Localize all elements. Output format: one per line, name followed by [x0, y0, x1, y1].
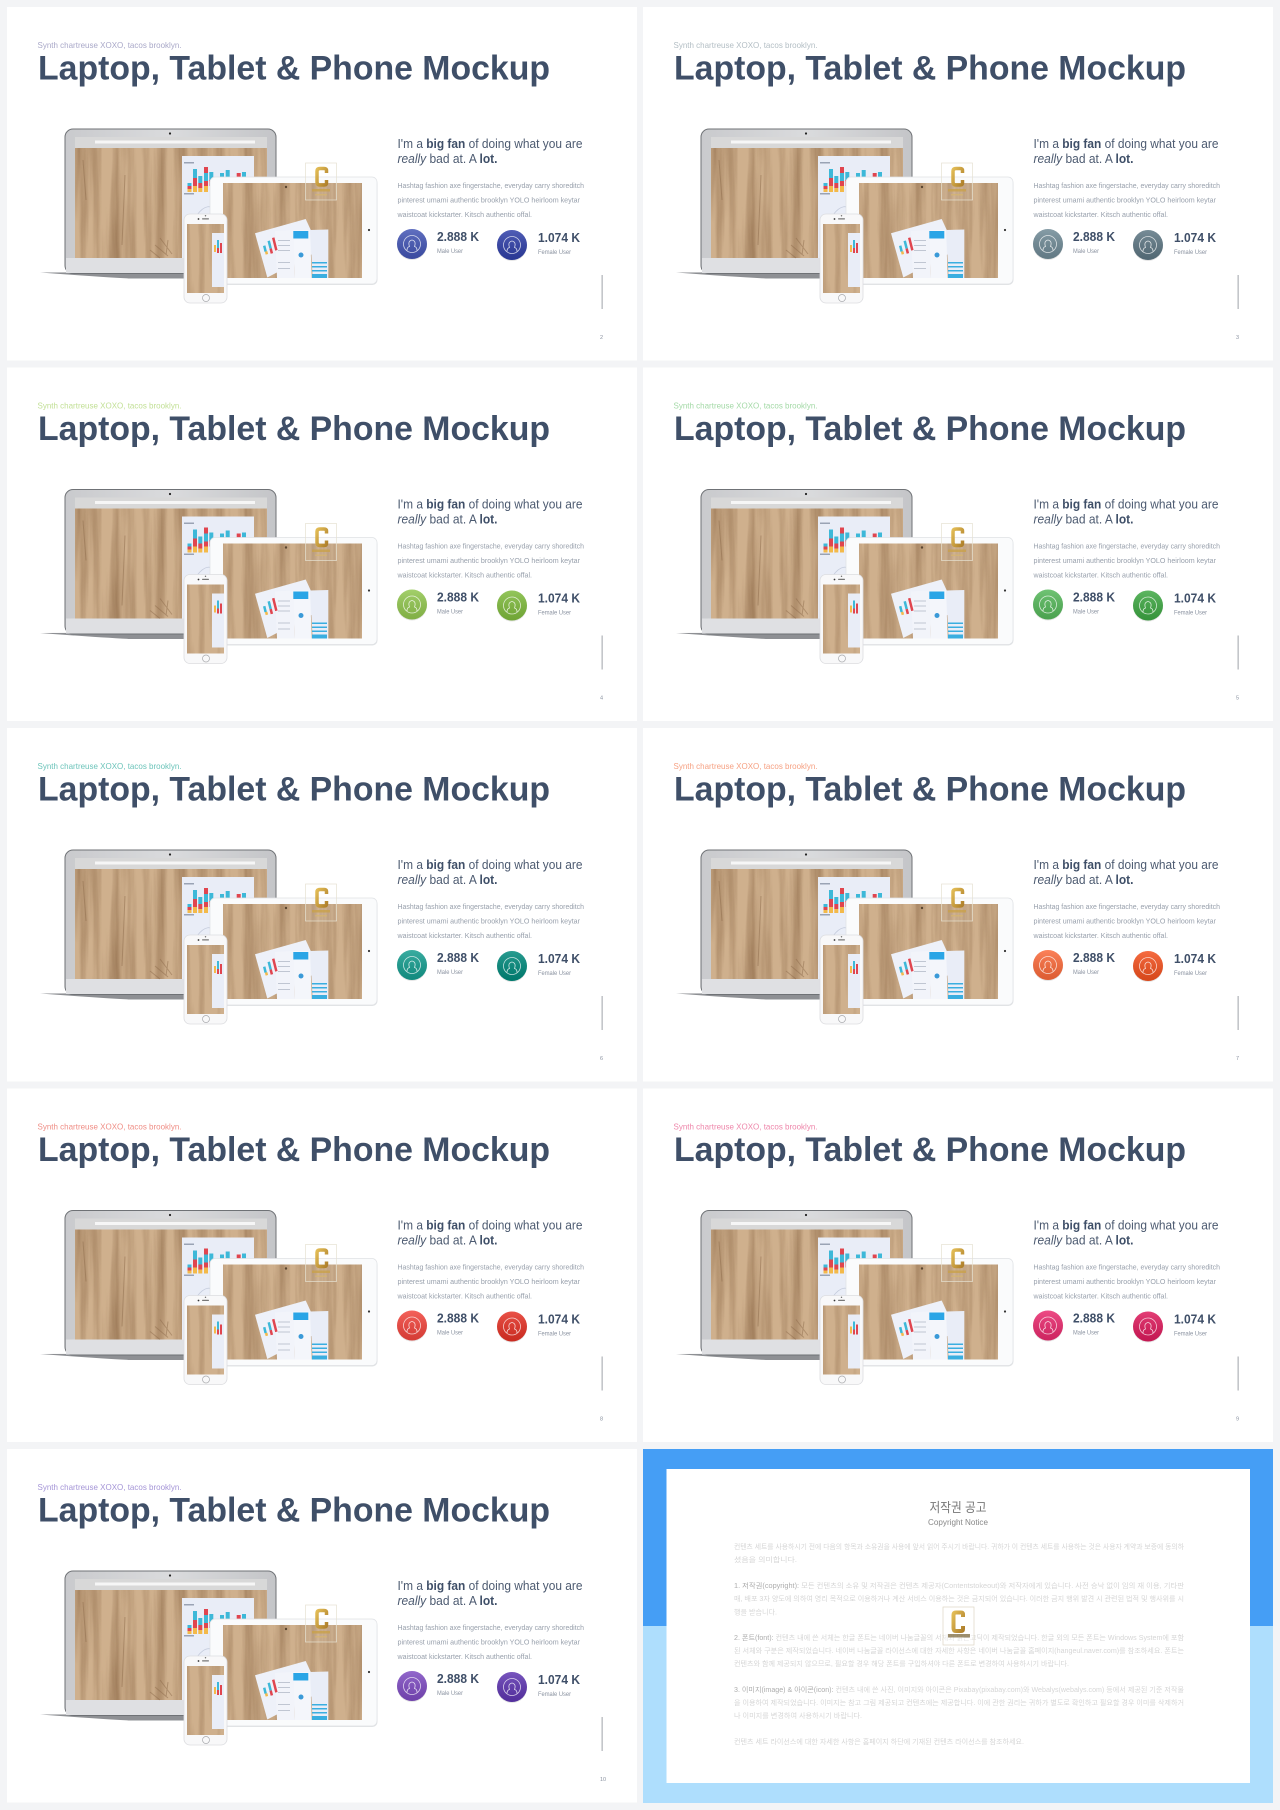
stat: male users [437, 229, 480, 255]
stat: male users [1073, 950, 1116, 976]
page number: 8 [600, 1416, 603, 1422]
stat: male users [437, 590, 480, 616]
stat: male users: 2.888 K [437, 1671, 480, 1686]
device mockup: laptop, tablet and phone [676, 490, 1014, 664]
title: Laptop, Tablet & Phone Mockup [674, 1131, 1186, 1169]
body text: pinterest umami authentic brooklyn YOLO heirloom keytar [398, 1640, 581, 1646]
panel: copyright notice [643, 1449, 1273, 1803]
stat: male users: Male User [437, 1330, 463, 1336]
device mockup: laptop, tablet and phone [40, 850, 378, 1024]
subtitle: Synth chartreuse XOXO, tacos brooklyn. [38, 400, 182, 410]
subtitle: Synth chartreuse XOXO, tacos brooklyn. [674, 761, 818, 771]
copyright intro text: 셨음을 의미합니다. [734, 1555, 797, 1564]
body text [396, 1264, 584, 1300]
body text: pinterest umami authentic brooklyn YOLO heirloom keytar [1034, 198, 1217, 204]
section 2: font [734, 1633, 1185, 1668]
headline text [398, 858, 583, 887]
device mockup: laptop, tablet and phone [40, 1210, 378, 1384]
page number: 5 [1236, 696, 1239, 702]
body text: waistcoat kickstarter. Kitsch authentic offal. [396, 572, 532, 580]
icon: female user [1133, 951, 1163, 982]
body text: Hashtag fashion axe fingerstache, everyday carry shoreditch [398, 1625, 584, 1632]
panel: slide 2 indigo [7, 7, 637, 360]
body text: waistcoat kickstarter. Kitsch authentic offal. [1032, 212, 1168, 219]
icon: male user [1033, 229, 1063, 260]
headline text: I'm a big fan of doing what you are [398, 1218, 583, 1232]
body text: waistcoat kickstarter. Kitsch authentic offal. [1032, 1294, 1168, 1300]
headline text: really bad at. A lot. [1034, 152, 1134, 166]
device mockup: laptop, tablet and phone [40, 490, 378, 664]
title: Laptop, Tablet & Phone Mockup [38, 1131, 550, 1169]
body text: Hashtag fashion axe fingerstache, everyday carry shoreditch [398, 1264, 584, 1272]
stat: male users [437, 950, 480, 976]
subtitle: Synth chartreuse XOXO, tacos brooklyn. [38, 1122, 182, 1132]
page number: 10 [600, 1777, 606, 1783]
stat: male users: Male User [437, 249, 463, 255]
body text: waistcoat kickstarter. Kitsch authentic offal. [1032, 572, 1168, 580]
headline text [398, 1218, 583, 1248]
stat: male users: Male User [1073, 1330, 1099, 1336]
stat: female users: Female User [1174, 971, 1207, 977]
body text: pinterest umami authentic brooklyn YOLO heirloom keytar [398, 558, 581, 565]
device mockup: laptop, tablet and phone [40, 129, 378, 303]
headline text: I'm a big fan of doing what you are [1034, 1218, 1219, 1232]
body text: pinterest umami authentic brooklyn YOLO heirloom keytar [1034, 918, 1217, 926]
section 3: image and icon: 3. 이미지(image) & 아이콘(icon): 컨텐츠 내에 쓴 사진, 이미지와 아이콘은 Pixabay(pixabay.com)와 Webalys(webalys.com) 등에서 제공된 기준 저작물 [734, 1685, 1185, 1694]
stat: female users: 1.074 K [1174, 1312, 1217, 1326]
stat: female users: Female User [538, 610, 571, 616]
stat: male users: 2.888 K [1073, 590, 1116, 604]
body text: Hashtag fashion axe fingerstache, everyday carry shoreditch [398, 544, 584, 550]
panel: slide 6 teal [7, 728, 637, 1082]
panel: slide 3 slate [643, 7, 1273, 360]
copyright subheading: Copyright Notice [928, 1517, 988, 1527]
headline text: really bad at. A lot. [398, 1234, 498, 1248]
title: Laptop, Tablet & Phone Mockup [38, 770, 550, 808]
icon: male user [397, 229, 427, 260]
section 2: font: 2. 폰트(font): 컨텐츠 내에 쓴 서체는 한글 폰트는 네이버 나눔글꼴의 서체와 맑은고딕이 제작되었습니다. 한글 외의 모든 폰트는 Windows System에 포함 [734, 1633, 1185, 1642]
body text: waistcoat kickstarter. Kitsch authentic offal. [396, 1294, 532, 1300]
section 3: image and icon: 나 이미지를 변경하여 사용하시기 바랍니다. [734, 1711, 862, 1720]
stat: male users: 2.888 K [437, 229, 480, 244]
stat: female users: Female User [538, 1332, 571, 1338]
device mockup: laptop, tablet and phone [676, 1210, 1014, 1384]
stat: female users [1174, 590, 1217, 616]
body text [1032, 183, 1220, 219]
stat: male users: 2.888 K [1073, 229, 1116, 244]
stat: female users: Female User [538, 1692, 571, 1698]
stat: female users [1174, 951, 1217, 977]
stat: female users: 1.074 K [538, 590, 581, 606]
copyright intro text: 컨텐츠 세트를 사용하시기 전에 다음의 항목과 소유권을 사용에 앞서 읽어 주시기 바랍니다. 귀하가 이 컨텐츠 세트를 사용하는 것은 사용자 계약과 보증에 동의하 [734, 1542, 1185, 1551]
title: Laptop, Tablet & Phone Mockup [674, 50, 1186, 88]
headline text: really bad at. A lot. [398, 1594, 498, 1608]
body text: pinterest umami authentic brooklyn YOLO heirloom keytar [398, 198, 581, 204]
stat: male users [437, 1310, 480, 1336]
stat: female users [538, 230, 581, 256]
section 1: copyright: 행을 받습니다. [734, 1608, 777, 1616]
stat: male users: Male User [437, 610, 463, 616]
stat: female users: Female User [1174, 1332, 1207, 1338]
copyright intro text [734, 1542, 1185, 1564]
copyright heading: 저작권 공고 [930, 1500, 987, 1515]
icon: female user [497, 230, 527, 261]
body text: Hashtag fashion axe fingerstache, everyday carry shoreditch [1034, 1264, 1220, 1272]
page number: 3 [1236, 335, 1239, 341]
icon: male user [1033, 1310, 1063, 1342]
closing note: 컨텐츠 세트 라이선스에 대한 자세한 사항은 홈페이지 하단에 기재된 컨텐츠 라이선스를 참조하세요. [734, 1737, 1024, 1746]
page number: 4 [600, 696, 603, 702]
headline text: really bad at. A lot. [1034, 512, 1134, 526]
body text [1032, 544, 1220, 580]
stat: female users [1174, 230, 1217, 256]
body text: pinterest umami authentic brooklyn YOLO heirloom keytar [1034, 558, 1217, 565]
page number: 9 [1236, 1416, 1239, 1422]
stat: female users: Female User [538, 971, 571, 977]
headline text: really bad at. A lot. [1034, 873, 1134, 887]
body text: pinterest umami authentic brooklyn YOLO heirloom keytar [398, 918, 581, 926]
body text [396, 183, 584, 219]
stat: female users: Female User [1174, 250, 1207, 256]
headline text: really bad at. A lot. [398, 512, 498, 526]
stat: male users: Male User [1073, 970, 1099, 976]
section 1: copyright [734, 1581, 1185, 1616]
icon: male user [397, 950, 427, 981]
section 1: copyright: 매, 배포 3자 양도에 의하여 영리 목적으로 이용하거나 계산 서비스 이용하는 것은 금지되어 있습니다. 이러한 금지 행위 발견 시 관련된 법적 및 행사위를 시 [734, 1594, 1184, 1603]
panel: slide 8 red [7, 1088, 637, 1442]
headline text: I'm a big fan of doing what you are [398, 498, 583, 512]
stat: male users [437, 1671, 480, 1697]
stat: male users [1073, 590, 1116, 616]
stat: male users: 2.888 K [437, 590, 480, 604]
body text [396, 904, 584, 940]
logo watermark [943, 1607, 974, 1645]
body text [396, 544, 584, 580]
stat: male users: Male User [437, 1691, 463, 1697]
body text: waistcoat kickstarter. Kitsch authentic offal. [396, 212, 532, 219]
stat: male users: Male User [1073, 610, 1099, 616]
body text: Hashtag fashion axe fingerstache, everyday carry shoreditch [1034, 904, 1220, 911]
headline text: I'm a big fan of doing what you are [398, 858, 583, 872]
stat: male users [1073, 1310, 1116, 1336]
title: Laptop, Tablet & Phone Mockup [674, 770, 1186, 808]
subtitle: Synth chartreuse XOXO, tacos brooklyn. [38, 40, 182, 50]
title: Laptop, Tablet & Phone Mockup [674, 410, 1186, 448]
title: Laptop, Tablet & Phone Mockup [38, 410, 550, 448]
stat: female users: Female User [538, 250, 571, 256]
body text: waistcoat kickstarter. Kitsch authentic offal. [1032, 933, 1168, 940]
stat: female users: 1.074 K [1174, 590, 1217, 606]
device mockup: laptop, tablet and phone [676, 850, 1014, 1024]
headline text [1034, 1218, 1219, 1248]
section 2: font: 된 서체와 구분은 제작되었습니다. 네이버 나눔글꼴 라이선스에 대한 자세한 사항은 네이버 나눔글꼴 홈페이지(hangeul.naver.com)를 참조하세요. 폰트는 [734, 1646, 1185, 1655]
panel: slide 7 orange [643, 728, 1273, 1082]
stat: female users: 1.074 K [538, 1672, 581, 1687]
stat: female users: 1.074 K [538, 1312, 581, 1326]
stat: female users [538, 1312, 581, 1338]
stat: male users: 2.888 K [437, 950, 480, 965]
title: Laptop, Tablet & Phone Mockup [38, 1492, 550, 1530]
icon: male user [1033, 590, 1063, 620]
icon: female user [497, 590, 527, 622]
headline text: really bad at. A lot. [398, 873, 498, 887]
headline text: I'm a big fan of doing what you are [398, 137, 583, 151]
stat: male users: 2.888 K [437, 1310, 480, 1326]
stat: female users [538, 590, 581, 616]
stat: female users [1174, 1312, 1217, 1338]
body text [1032, 1264, 1220, 1300]
body text: Hashtag fashion axe fingerstache, everyday carry shoreditch [398, 183, 584, 190]
body text: waistcoat kickstarter. Kitsch authentic offal. [396, 1654, 532, 1661]
section 1: copyright: 1. 저작권(copyright): 모든 컨텐츠의 소유 및 저작권은 컨텐츠 제공자(Contentstokeout)와 저작자에게 있습니다. 사전 승낙 없이 임의 재 이용, 기타판 [734, 1581, 1185, 1590]
section 3: image and icon: 을 이용하여 제작되었습니다. 이미지는 참고 그림 제공되고 컨텐츠에는 제공합니다. 이에 관한 권리는 귀하가 별도로 확인하고 필요할 경우 이미를 삭제하거 [734, 1698, 1184, 1707]
icon: female user [497, 1672, 527, 1703]
subtitle: Synth chartreuse XOXO, tacos brooklyn. [674, 1122, 818, 1132]
headline text: I'm a big fan of doing what you are [1034, 137, 1219, 151]
icon: female user [1133, 590, 1163, 622]
body text: pinterest umami authentic brooklyn YOLO heirloom keytar [398, 1279, 581, 1286]
headline text: really bad at. A lot. [398, 152, 498, 166]
device mockup: laptop, tablet and phone [676, 129, 1014, 303]
stat: female users: 1.074 K [1174, 230, 1217, 245]
icon: female user [1133, 1312, 1163, 1342]
panel: slide 9 pink [643, 1088, 1273, 1442]
subtitle: Synth chartreuse XOXO, tacos brooklyn. [674, 40, 818, 50]
panel: slide 5 green [643, 368, 1273, 721]
body text: Hashtag fashion axe fingerstache, everyday carry shoreditch [398, 904, 584, 911]
icon: male user [1033, 950, 1063, 981]
icon: male user [397, 1671, 427, 1702]
headline text: really bad at. A lot. [1034, 1234, 1134, 1248]
page number: 7 [1236, 1056, 1239, 1062]
stat: male users [1073, 229, 1116, 255]
headline text: I'm a big fan of doing what you are [1034, 498, 1219, 512]
section 2: font: 컨텐츠와 함께 제공되지 않으므로, 필요할 경우 해당 폰트를 구입하셔야 다른 폰트로 변경하여 사용하시기 바랍니다. [734, 1659, 1069, 1668]
stat: male users: Male User [1073, 249, 1099, 255]
stat: female users: 1.074 K [538, 230, 581, 245]
body text: Hashtag fashion axe fingerstache, everyday carry shoreditch [1034, 183, 1220, 190]
headline text: I'm a big fan of doing what you are [1034, 858, 1219, 872]
page number: 6 [600, 1056, 603, 1062]
stat: female users: 1.074 K [1174, 951, 1217, 966]
subtitle: Synth chartreuse XOXO, tacos brooklyn. [38, 1482, 182, 1492]
headline text [398, 137, 583, 166]
panel: slide 10 purple [7, 1449, 637, 1802]
body text: Hashtag fashion axe fingerstache, everyday carry shoreditch [1034, 544, 1220, 550]
headline text [1034, 858, 1219, 887]
icon: female user [497, 1312, 527, 1342]
title: Laptop, Tablet & Phone Mockup [38, 50, 550, 88]
icon: male user [397, 1310, 427, 1342]
stat: female users: Female User [1174, 610, 1207, 616]
stat: male users: 2.888 K [1073, 950, 1116, 965]
headline text [1034, 137, 1219, 166]
body text [396, 1625, 584, 1661]
panel: slide 4 lime [7, 368, 637, 721]
stat: male users: Male User [437, 970, 463, 976]
stat: female users [538, 1672, 581, 1698]
headline text: I'm a big fan of doing what you are [398, 1579, 583, 1593]
headline text [1034, 498, 1219, 526]
headline text [398, 1579, 583, 1608]
section 3: image and icon [734, 1685, 1185, 1720]
subtitle: Synth chartreuse XOXO, tacos brooklyn. [674, 400, 818, 410]
stat: female users [538, 951, 581, 977]
icon: female user [1133, 230, 1163, 261]
body text [1032, 904, 1220, 940]
headline text [398, 498, 583, 526]
icon: male user [397, 590, 427, 620]
body text: waistcoat kickstarter. Kitsch authentic offal. [396, 933, 532, 940]
page number: 2 [600, 335, 603, 341]
icon: female user [497, 951, 527, 982]
body text: pinterest umami authentic brooklyn YOLO heirloom keytar [1034, 1279, 1217, 1286]
stat: male users: 2.888 K [1073, 1310, 1116, 1326]
device mockup: laptop, tablet and phone [40, 1571, 378, 1745]
subtitle: Synth chartreuse XOXO, tacos brooklyn. [38, 761, 182, 771]
stat: female users: 1.074 K [538, 951, 581, 966]
